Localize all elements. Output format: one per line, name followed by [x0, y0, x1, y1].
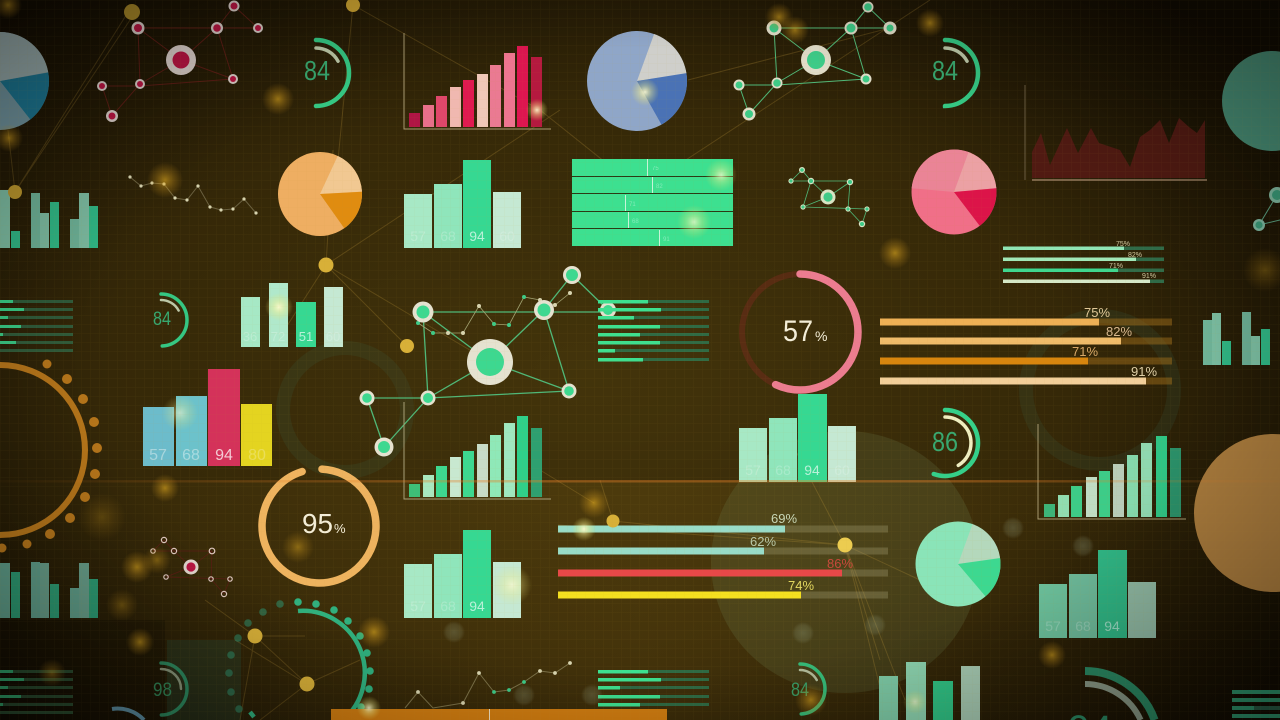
bar chart: narrow four bars: [241, 283, 343, 347]
gauge: 86: 86: [932, 426, 958, 457]
arc: bottom left teal: [112, 709, 144, 720]
bar chart: coloured four bars: 94: [215, 447, 233, 464]
bar chart: green four bars centre right: 57: [745, 462, 761, 478]
table: horizontal bars bottom right: [1232, 690, 1280, 718]
gauge: 84 small: [135, 294, 187, 346]
bar chart: coloured four bars: 57: [149, 447, 167, 464]
gauge: 84 top left: 84: [304, 55, 330, 86]
progress bars: small green: 91%: [1142, 273, 1156, 280]
area chart: dark red: [1025, 85, 1207, 180]
bar chart: green four bars centre: 94: [469, 598, 485, 614]
bar chart: crimson rising bars: [404, 33, 551, 129]
panel: green network top: [734, 2, 896, 120]
table: green rows: 68: [632, 219, 639, 225]
gauge: 86: [912, 410, 978, 476]
gauge: 98: 98: [153, 680, 172, 701]
pie chart: blue: [587, 31, 687, 131]
bar chart: green four bars centre right: 60: [834, 462, 850, 478]
ring: big orange dotted: [0, 360, 102, 552]
bar chart: narrow four bars: 72: [271, 329, 285, 344]
table: green rows: 75: [652, 166, 659, 172]
table: horizontal bars bottom left: [0, 670, 73, 714]
bar chart: green four bars top: 57: [410, 228, 426, 244]
gauge: 84 top left: [283, 40, 349, 106]
progress bars: small green: 82%: [1128, 252, 1142, 259]
bar chart: dim four bars right: 94: [1104, 618, 1120, 634]
ring: 95 percent: [259, 466, 379, 586]
progress bars: orange: 82%: [1106, 324, 1132, 339]
pie chart: green: [916, 522, 1000, 606]
bar chart: coloured four bars: [143, 369, 272, 466]
pie chart: orange: [278, 152, 362, 236]
bar chart: dim four bars right: 57: [1045, 618, 1061, 634]
gauge: 94 large bottom: [1068, 671, 1155, 720]
bar chart: green four bars top: 94: [469, 228, 485, 244]
progress bars: small green: [1003, 241, 1164, 283]
progress bars: orange: [880, 305, 1172, 384]
bar chart: narrow four bars: 51: [299, 329, 313, 344]
ring: 57 percent: [742, 274, 858, 390]
flare line: [0, 480, 1280, 482]
bar chart: green four bars centre right: 68: [775, 462, 791, 478]
bar chart: narrow four bars bottom: [879, 662, 980, 720]
table: green rows: 91: [663, 237, 670, 243]
progress bars: multicolour: 69%: [771, 511, 797, 526]
gauge: 84 bottom: [775, 664, 825, 714]
ring: 95 percent: 95%: [302, 508, 346, 539]
gauge: 84 top right: [912, 40, 978, 106]
ring: large green dotted: [225, 598, 374, 720]
bar chart: green four bars centre: 57: [410, 598, 426, 614]
bar chart: narrow four bars: 36: [243, 329, 257, 344]
bar chart: grouped bars left upper: [0, 190, 98, 248]
gauge: 98: [135, 663, 187, 715]
table: green rows: [572, 159, 733, 246]
line chart: bottom centre: [405, 661, 572, 708]
progress bars: small green: 75%: [1116, 241, 1130, 248]
bar chart: green four bars top: 60: [499, 228, 515, 244]
bar chart: green four bars top: [404, 160, 521, 248]
table: green rows: 82: [656, 184, 663, 190]
gauge: 84 bottom: 84: [791, 680, 809, 701]
pie chart: teal right: [1222, 51, 1280, 151]
bar chart: green four bars centre: 68: [440, 598, 456, 614]
bar chart: grouped bars right: [1203, 312, 1270, 365]
panel: right edge network: [1253, 187, 1280, 231]
panel: left pie chart: [0, 32, 49, 130]
panel: small green network: [788, 167, 870, 227]
bar: orange bottom strip: [331, 709, 667, 720]
table: green rows: 71: [629, 202, 636, 208]
bar chart: green rising bars right: [1038, 424, 1186, 519]
bar chart: green four bars top: 68: [440, 228, 456, 244]
progress bars: orange: 91%: [1131, 364, 1157, 379]
progress bars: multicolour: 74%: [788, 578, 814, 593]
pie chart: tan right: [1194, 434, 1280, 592]
gauge: 84 top right: 84: [932, 55, 958, 86]
bar chart: coloured four bars: 80: [248, 447, 266, 464]
progress bars: multicolour: [558, 511, 888, 598]
bar chart: green four bars centre right: [739, 394, 856, 482]
bar chart: green rising bars: [404, 402, 551, 499]
progress bars: multicolour: 86%: [827, 556, 853, 571]
progress bars: orange: 71%: [1072, 344, 1098, 359]
bar chart: narrow four bars: 60: [326, 329, 340, 344]
panel: small red network: [151, 537, 232, 597]
progress bars: multicolour: 62%: [750, 534, 776, 549]
table: horizontal bars center: [598, 300, 709, 362]
panel: red network: [97, 0, 263, 122]
pie chart: pink: [912, 150, 996, 234]
bar chart: grouped bars left lower: [0, 562, 98, 618]
gold connector lines: [8, 0, 930, 720]
table: horizontal bars left: [0, 300, 73, 352]
bar chart: dim four bars right: 68: [1075, 618, 1091, 634]
progress bars: small green: 71%: [1109, 263, 1123, 270]
bar chart: green four bars centre: [404, 530, 521, 618]
progress bars: orange: 75%: [1084, 305, 1110, 320]
bar chart: dim four bars right: [1039, 550, 1156, 638]
gold network nodes: [8, 0, 852, 692]
ring: 57 percent: 57%: [783, 315, 827, 348]
gauge: 84 small: 84: [153, 309, 171, 330]
bar chart: green four bars centre right: 94: [804, 462, 820, 478]
panel: main green network: [360, 266, 616, 456]
table: horizontal bars bottom centre: [598, 670, 709, 706]
bar chart: coloured four bars: 68: [182, 447, 200, 464]
line chart: top left: [128, 175, 258, 215]
